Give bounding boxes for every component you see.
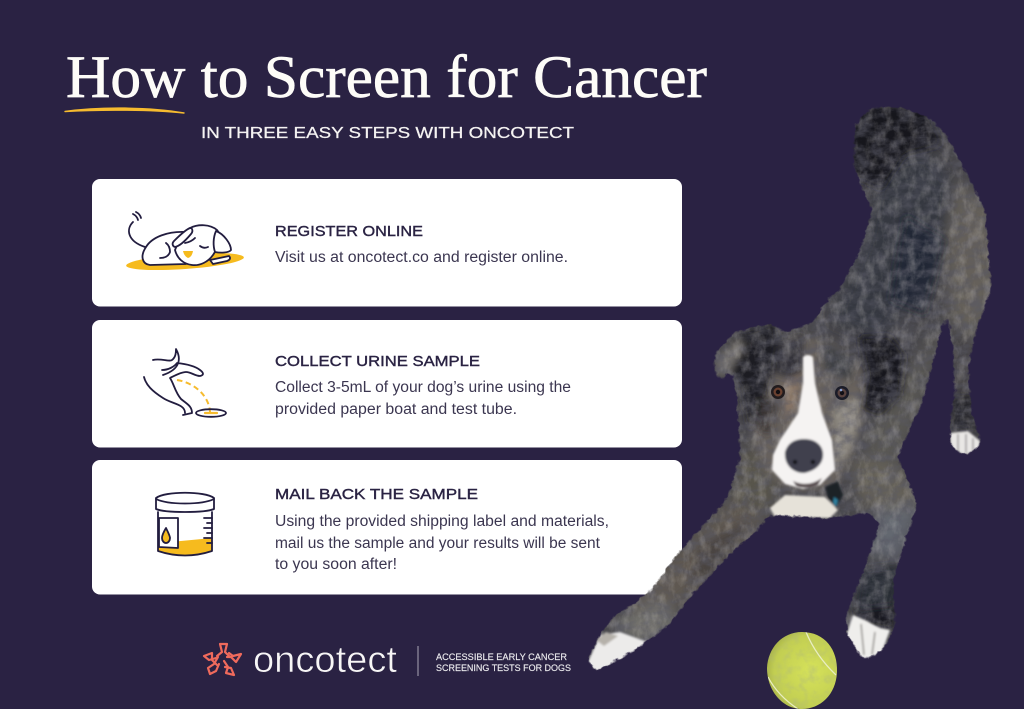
dark fur patches xyxy=(690,105,978,630)
step 3 text: mail us the sample and your results will be sent xyxy=(275,535,601,552)
icon: sleeping dog xyxy=(126,212,244,273)
step 3 text xyxy=(275,513,609,573)
subtitle: IN THREE EASY STEPS WITH ONCOTECT xyxy=(201,125,574,142)
panel: step 3 mail back the sample xyxy=(92,460,682,594)
front left paw xyxy=(587,632,650,672)
logo divider xyxy=(418,646,419,676)
hind leg xyxy=(945,180,995,340)
card background xyxy=(92,320,682,448)
step 2 text: Collect 3-5mL of your dog’s urine using the xyxy=(275,379,571,396)
white blaze and muzzle xyxy=(772,355,835,489)
back xyxy=(834,156,951,334)
shoulders and neck xyxy=(866,338,938,466)
collar tag xyxy=(825,481,843,508)
step 1 text: Visit us at oncotect.co and register online. xyxy=(275,249,568,266)
tagline: SCREENING TESTS FOR DOGS xyxy=(436,663,571,674)
front legs xyxy=(632,500,767,612)
chest xyxy=(770,495,838,518)
step 2 text: provided paper boat and test tube. xyxy=(275,401,517,418)
dog photo illustration xyxy=(588,106,992,670)
icon: oncotect star logo xyxy=(204,644,241,675)
tagline: ACCESSIBLE EARLY CANCER xyxy=(436,652,567,663)
panel: step 2 collect urine sample xyxy=(92,320,682,448)
ears xyxy=(730,324,782,431)
step 3 heading: MAIL BACK THE SAMPLE xyxy=(275,486,478,503)
hind paw xyxy=(950,431,980,455)
title: How to Screen for Cancer xyxy=(66,44,707,110)
tennis ball xyxy=(767,632,837,709)
front right paw xyxy=(846,615,890,662)
step 3 text: to you soon after! xyxy=(275,556,397,573)
nose xyxy=(785,439,823,473)
tagline xyxy=(436,652,571,674)
eyes xyxy=(771,385,849,400)
title block xyxy=(65,44,707,142)
head markings xyxy=(772,335,803,378)
card background xyxy=(92,179,682,306)
card background xyxy=(92,460,682,594)
wordmark: oncotect xyxy=(253,639,398,680)
step 2 heading: COLLECT URINE SAMPLE xyxy=(275,353,480,370)
icon: dog urinating xyxy=(144,349,226,417)
step 2 text xyxy=(275,379,571,418)
step 3 text: Using the provided shipping label and materials, xyxy=(275,513,609,530)
logo footer xyxy=(204,639,571,680)
icon: sample jar xyxy=(156,493,214,560)
head xyxy=(750,335,870,492)
title underline xyxy=(65,108,184,113)
panel: step 1 register online xyxy=(92,179,682,306)
fur texture xyxy=(624,106,974,644)
step 1 heading: REGISTER ONLINE xyxy=(275,223,423,240)
